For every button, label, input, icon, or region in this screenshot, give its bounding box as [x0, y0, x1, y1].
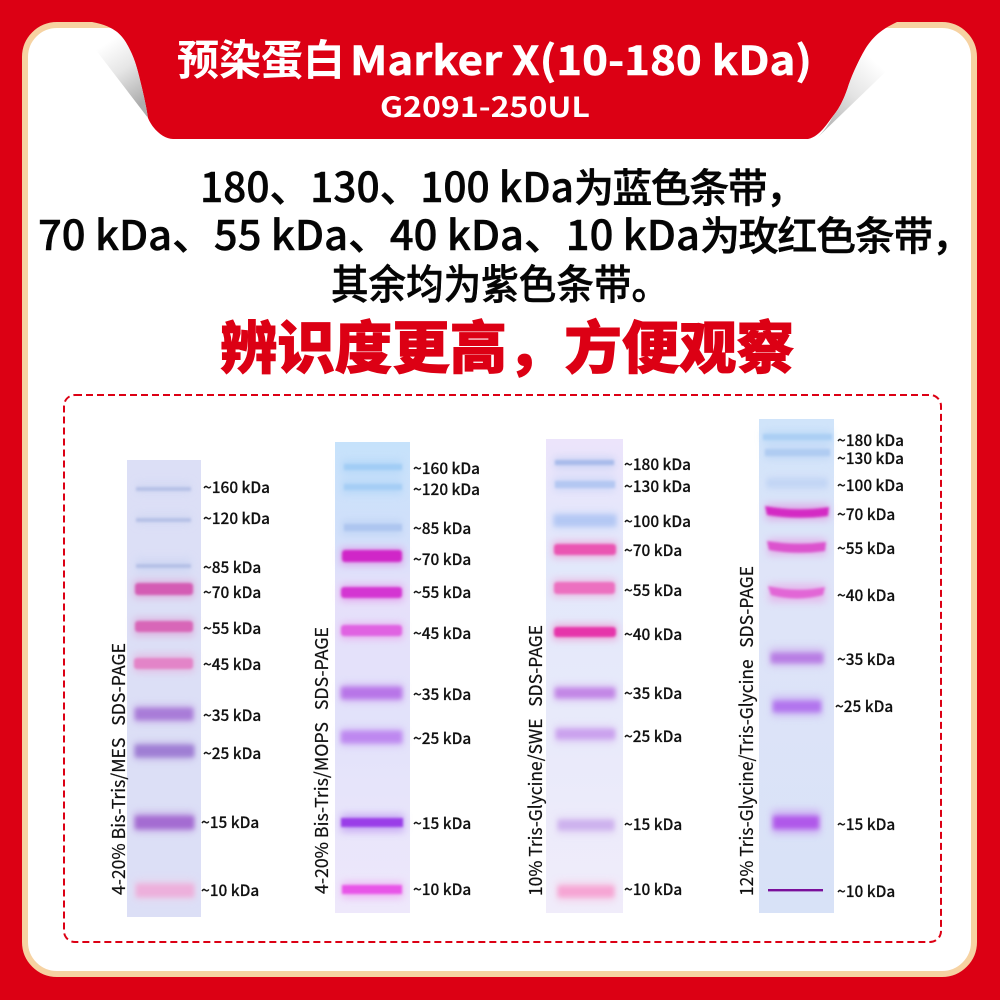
labels lane 1: ~70 kDa: [203, 581, 261, 603]
description text: 为玫红色条带，: [700, 204, 972, 262]
labels lane 3: ~55 kDa: [624, 579, 682, 601]
labels lane 4: ~180 kDa: [837, 429, 904, 451]
labels lane 2: ~70 kDa: [413, 548, 471, 570]
title: [177, 27, 812, 88]
labels lane 1: ~15 kDa: [201, 811, 259, 833]
gel lane 3: 10% Tris-Glycine/SWE: [546, 439, 623, 913]
labels lane 2: ~15 kDa: [413, 812, 471, 834]
labels lane 1: ~120 kDa: [203, 507, 270, 529]
labels lane 4: ~15 kDa: [837, 813, 895, 835]
gel lane 4: 12% Tris-Glycine/Tris-Glycine: [759, 419, 834, 913]
labels lane 2: ~45 kDa: [413, 622, 471, 644]
labels lane 1: [201, 476, 270, 901]
labels lane 1: ~160 kDa: [203, 476, 270, 498]
labels lane 1: ~85 kDa: [203, 556, 261, 578]
labels lane 4: ~100 kDa: [837, 474, 904, 496]
labels lane 3: ~25 kDa: [624, 725, 682, 747]
labels lane 4: ~55 kDa: [837, 537, 895, 559]
labels lane 2: [413, 457, 480, 900]
description text: 70 kDa、55 kDa、40 kDa、10 kDa: [38, 202, 700, 262]
page curl: left: [79, 28, 148, 118]
description text: 为蓝色条带，: [574, 156, 806, 214]
labels lane 2: ~85 kDa: [413, 517, 471, 539]
gel lane 1: 4-20% Bis-Tris/MES: [127, 460, 201, 917]
product code: G2091-250UL: [380, 86, 590, 126]
header banner: [92, 18, 897, 139]
title: 预染蛋白: [177, 27, 345, 88]
labels lane 3: ~10 kDa: [624, 878, 682, 900]
labels lane 2: ~10 kDa: [413, 878, 471, 900]
10 kDa sharp band: [768, 889, 823, 891]
labels lane 2: ~160 kDa: [413, 457, 480, 479]
labels lane 2: ~120 kDa: [413, 478, 480, 500]
title: Marker X(10-180 kDa): [350, 29, 812, 87]
labels lane 4: ~10 kDa: [837, 880, 895, 902]
labels lane 1: ~35 kDa: [203, 704, 261, 726]
labels lane 3: ~35 kDa: [624, 682, 682, 704]
labels lane 2: ~25 kDa: [413, 727, 471, 749]
labels lane 1: ~25 kDa: [203, 742, 261, 764]
gel lane 2: 4-20% Bis-Tris/MOPS: [335, 442, 410, 913]
labels lane 1: ~10 kDa: [201, 879, 259, 901]
labels lane 1: ~45 kDa: [203, 653, 261, 675]
labels lane 4: ~130 kDa: [837, 447, 904, 469]
labels lane 3: [624, 453, 691, 900]
rotated caption lane 3: 10% Tris-Glycine/SWE SDS-PAGE: [522, 625, 548, 896]
labels lane 3: ~70 kDa: [624, 539, 682, 561]
labels lane 3: ~15 kDa: [624, 813, 682, 835]
labels lane 4: ~35 kDa: [837, 648, 895, 670]
description text: [38, 154, 972, 311]
rotated caption lane 1: 4-20% Bis-Tris/MES SDS-PAGE: [105, 643, 131, 895]
labels lane 3: ~180 kDa: [624, 453, 691, 475]
labels lane 3: ~40 kDa: [624, 623, 682, 645]
rotated caption lane 2: 4-20% Bis-Tris/MOPS SDS-PAGE: [308, 627, 334, 894]
labels lane 4: [835, 429, 904, 902]
labels lane 4: ~40 kDa: [837, 584, 895, 606]
labels lane 3: ~100 kDa: [624, 510, 691, 532]
description text: 180、130、100 kDa: [200, 154, 574, 214]
labels lane 2: ~35 kDa: [413, 683, 471, 705]
labels lane 2: ~55 kDa: [413, 581, 471, 603]
page curl: right: [818, 46, 900, 137]
labels lane 1: ~55 kDa: [203, 617, 261, 639]
labels lane 4: ~25 kDa: [835, 695, 893, 717]
dashed panel: [64, 395, 941, 942]
rotated caption lane 4: 12% Tris-Glycine/Tris-Glycine SDS-PAGE: [733, 566, 759, 896]
red slogan: 辨识度更高，方便观察: [220, 303, 794, 385]
labels lane 3: ~130 kDa: [624, 475, 691, 497]
description text: 其余均为紫色条带。: [331, 251, 669, 311]
labels lane 4: ~70 kDa: [837, 503, 895, 525]
